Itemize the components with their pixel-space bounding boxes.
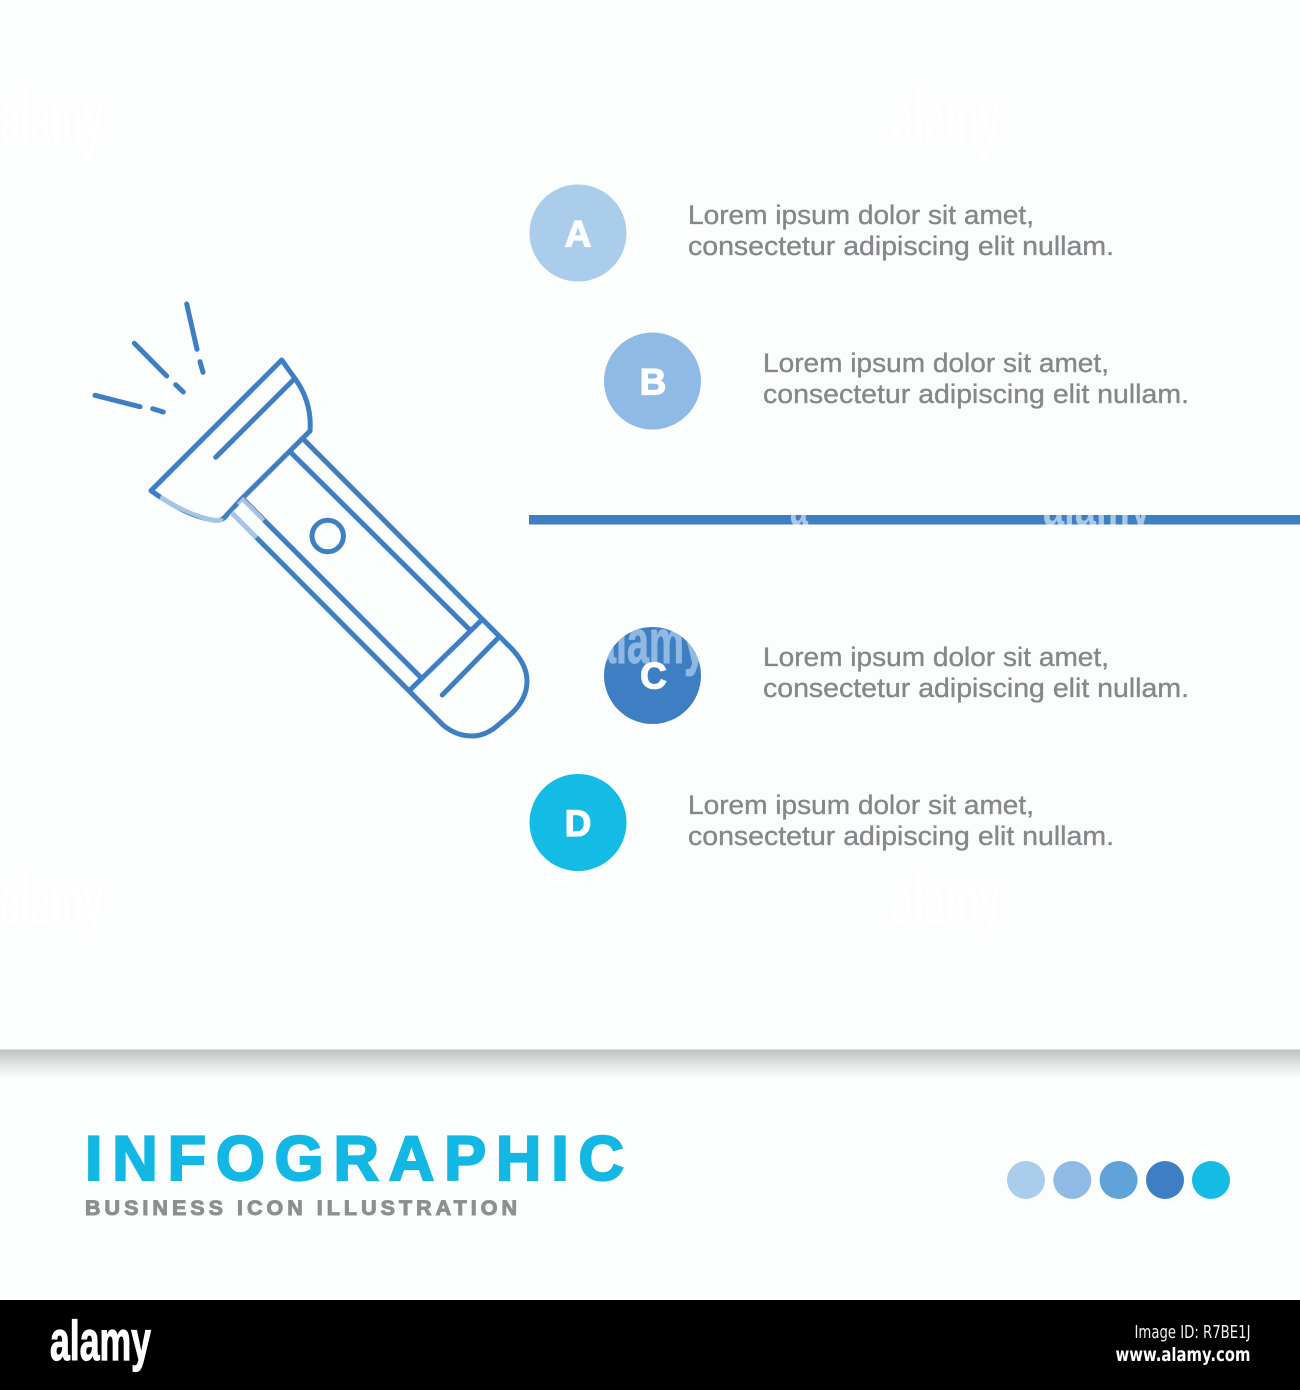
website: www.alamy.com xyxy=(1116,1344,1250,1366)
body inner lines xyxy=(243,453,470,678)
head inner line xyxy=(216,380,293,457)
flashlight switch xyxy=(312,520,343,552)
badge C: alamy xyxy=(594,608,706,677)
footer shadow band xyxy=(0,1050,1300,1078)
icon: flashlight xyxy=(95,304,527,736)
faint watermarks: alamy xyxy=(892,79,1000,159)
divider line: a xyxy=(790,480,809,536)
divider line: alamy xyxy=(1043,480,1151,536)
badge D xyxy=(530,774,626,871)
watermark over flashlight xyxy=(160,498,262,536)
divider line xyxy=(529,515,1300,524)
text B: consectetur adipiscing elit nullam. xyxy=(763,379,1189,409)
flashlight body and cap xyxy=(231,441,527,736)
palette dots xyxy=(1007,1161,1230,1199)
text C: consectetur adipiscing elit nullam. xyxy=(763,673,1189,703)
alamy logo: alamy xyxy=(50,1309,151,1372)
flashlight head xyxy=(151,360,310,521)
badge C: C xyxy=(640,656,667,696)
subtitle: BUSINESS ICON ILLUSTRATION xyxy=(85,1196,517,1220)
text D: consectetur adipiscing elit nullam. xyxy=(688,821,1114,851)
faint watermarks xyxy=(0,79,1000,941)
faint watermarks: alamy xyxy=(0,861,103,941)
badge B: B xyxy=(640,362,666,402)
badge B xyxy=(604,332,701,430)
title: INFOGRAPHIC xyxy=(85,1124,624,1194)
text B: Lorem ipsum dolor sit amet, xyxy=(763,348,1109,378)
text D: Lorem ipsum dolor sit amet, xyxy=(688,790,1034,820)
text C: Lorem ipsum dolor sit amet, xyxy=(763,642,1109,672)
step A xyxy=(530,184,1114,282)
text A: consectetur adipiscing elit nullam. xyxy=(688,231,1114,261)
text A: Lorem ipsum dolor sit amet, xyxy=(688,200,1034,230)
step B xyxy=(604,332,1189,430)
badge A xyxy=(530,184,626,282)
faint watermarks: alamy xyxy=(0,79,103,159)
step C xyxy=(604,627,1187,724)
icon: light rays xyxy=(95,304,203,412)
badge A: A xyxy=(565,214,591,254)
footer bar xyxy=(0,1300,1300,1390)
faint watermarks: alamy xyxy=(892,861,1000,941)
badge D: D xyxy=(565,803,591,844)
step D xyxy=(530,774,1114,871)
badge C xyxy=(604,627,701,724)
cap bands xyxy=(411,620,498,695)
image id: Image ID: R7BE1J xyxy=(1134,1322,1250,1343)
